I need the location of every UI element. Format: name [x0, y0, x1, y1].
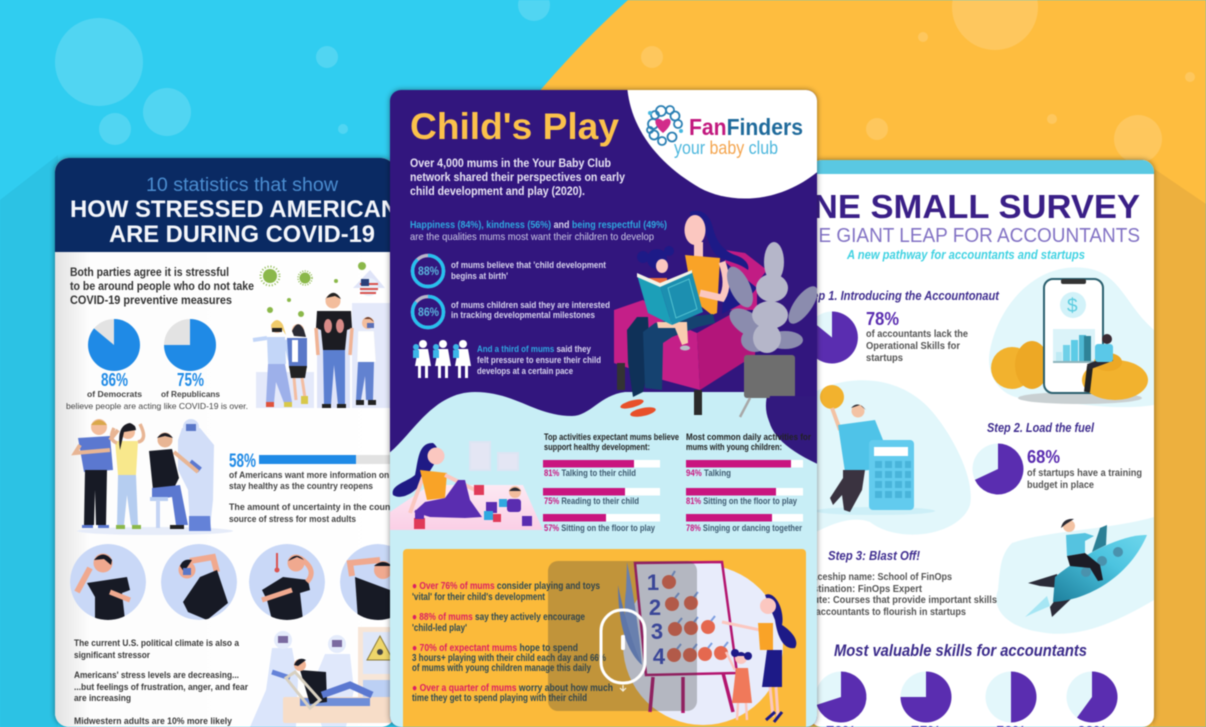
- light wave background: [385, 392, 817, 727]
- text: stress factors: ...but feelings of frustration, anger, and fear: [74, 682, 248, 693]
- illustration: medics with patient: [250, 627, 397, 727]
- illustration: phone and coins: $: [1067, 296, 1078, 317]
- pie: 50%: [986, 672, 1036, 727]
- text: a third of mums: felt pressure to ensure their child: [477, 355, 601, 365]
- white logo blob: [627, 85, 822, 199]
- text: course details: Spaceship name: School of FinOps: [801, 572, 952, 583]
- logo: FanFinders your baby club: FanFinders: [689, 114, 803, 140]
- qualities text: [410, 219, 667, 243]
- ring: 86%: [412, 296, 444, 328]
- chart: top activities expectant mums: support healthy development:: [544, 442, 650, 452]
- step 1 heading: Step 1. Introducing the Accountonaut: [801, 289, 1000, 303]
- title line 2: ARE DURING COVID-19: [109, 221, 375, 248]
- chart: most common daily activities: mums with young children:: [686, 442, 782, 452]
- chart: most common daily activities: [686, 432, 811, 534]
- chart: most common daily activities: Most common daily activities for: [686, 432, 811, 442]
- step 3 heading: Step 3: Blast Off!: [828, 549, 920, 563]
- text: course details: Destination: FinOps Expert: [801, 584, 923, 595]
- pie: 78% of accountants: of accountants lack the: [866, 329, 968, 340]
- pie: 68% of startups: budget in place: [1027, 480, 1094, 491]
- pie: 75% of Republicans: of Republicans: [161, 390, 221, 399]
- illustration: man with calculator: [810, 380, 971, 535]
- pie: 75%: [900, 672, 952, 727]
- text: course details: [801, 572, 997, 618]
- intro text: Over 4,000 mums in the Your Baby Club: [410, 156, 611, 170]
- chart: top activities expectant mums: [543, 432, 679, 534]
- text: key findings: 'vital' for their child's development: [412, 591, 545, 603]
- text: stress factors: are increasing: [74, 693, 131, 704]
- intro text: COVID-19 preventive measures: [70, 295, 232, 307]
- chart: most common daily activities: 94% Talking: [686, 468, 731, 479]
- symptom circle: fever: [249, 544, 325, 620]
- intro text: child development and play (2020).: [410, 184, 585, 198]
- text: key findings: ● Over 76% of mums consider playing and toys: [412, 580, 600, 592]
- text: key findings: ● 88% of mums say they actively encourage: [412, 611, 585, 623]
- pie: 75% of Republicans: [161, 319, 221, 399]
- text: 88% statement: of mums believe that 'child development: [451, 260, 606, 270]
- illustration: counting easel with mum and daughter: 4: [653, 644, 666, 669]
- ring: 86%: 86%: [418, 307, 439, 319]
- text: 86% statement: [451, 300, 610, 320]
- text: 86% statement: of mums children said they are interested: [451, 300, 610, 310]
- text: stress factors: significant stressor: [74, 650, 150, 661]
- chart: top activities expectant mums: Top activities expectant mums believe: [544, 432, 679, 442]
- scroll overlay with mouse icon: [548, 561, 697, 711]
- illustration: counting easel with mum and daughter: 2: [649, 595, 661, 620]
- chart: top activities expectant mums: 75% Reading to their child: [544, 496, 639, 507]
- illustration: potted plant: [722, 242, 823, 417]
- pie caption: believe people are acting like COVID-19 is over.: [66, 401, 248, 411]
- illustration: counting easel with mum and daughter: [618, 562, 796, 725]
- chart: most common daily activities: 81% Sitting on the floor to play: [686, 496, 798, 507]
- panel: yellow facts box: [403, 549, 806, 727]
- chart: top activities expectant mums: 81% Talking to their child: [544, 468, 636, 479]
- text: a third of mums: And a third of mums said they: [477, 344, 591, 354]
- pie: 78% of accountants: Operational Skills for: [866, 341, 960, 352]
- text: information wanted: The amount of uncertainty in the country is a: [229, 502, 420, 513]
- text: key findings: of mums with young children manage this daily: [412, 662, 591, 674]
- subtitle: 10 statistics that show: [146, 175, 338, 196]
- text: 86% statement: in tracking developmental milestones: [451, 310, 595, 320]
- blob: right purple shape: [768, 396, 822, 466]
- stat: 58% bar: [228, 452, 390, 468]
- title line 1: HOW STRESSED AMERICANS: [70, 196, 414, 223]
- intro text: [410, 156, 625, 198]
- panel: stressed Americans infographic: [55, 158, 420, 727]
- text: key findings: 3 hours+ playing with their child each day and 66%: [412, 652, 607, 664]
- text: key findings: time they get to spend playing with their child: [412, 692, 587, 704]
- text: key findings: [412, 580, 613, 704]
- pie: 75% of Republicans: 75%: [177, 370, 204, 390]
- text: a third of mums: develops at a certain pace: [477, 366, 573, 376]
- pie: 60%: [1066, 672, 1118, 727]
- logo: FanFinders your baby club: your baby club: [674, 138, 778, 158]
- logo: FanFinders your baby club: [647, 106, 803, 158]
- pie: 78% of accountants: [806, 309, 968, 364]
- illustration: counting easel with mum and daughter: 1: [647, 570, 659, 595]
- text: stress factors: Americans' stress levels are decreasing...: [74, 670, 239, 681]
- symptom circle: dizziness: [161, 544, 237, 620]
- intro text: Both parties agree it is stressful: [70, 267, 229, 279]
- illustration: people with medic: [75, 419, 233, 535]
- pie: 68% of startups: of startups have a training: [1027, 468, 1142, 479]
- header band: [55, 158, 400, 252]
- ring: 88%: [412, 256, 444, 286]
- title: Child's Play: [410, 106, 619, 147]
- illustration: accountant on rocket: [996, 517, 1154, 634]
- subtitle: ONE GIANT LEAP FOR ACCOUNTANTS: [790, 225, 1140, 247]
- illustration: mum reading with child: [614, 211, 767, 419]
- pie: 86% of Democrats: 86%: [101, 370, 128, 390]
- symptom circle: headache: [340, 544, 391, 621]
- pie: 78% of accountants: startups: [866, 353, 903, 364]
- pie: 70%: [816, 672, 866, 727]
- text: information wanted: source of stress for most adults: [229, 514, 356, 525]
- chart: most common daily activities: 78% Singing or dancing together: [686, 523, 802, 534]
- tagline: A new pathway for accountants and startups: [846, 248, 1085, 262]
- pie: 86% of Democrats: of Democrats: [87, 390, 143, 399]
- icon: three mums with children: [413, 340, 471, 378]
- intro text: [70, 267, 254, 307]
- illustration: mum playing with blocks: [390, 442, 543, 530]
- title: ONE SMALL SURVEY: [786, 188, 1140, 225]
- text: 88% statement: begins at birth': [451, 271, 508, 281]
- qualities text: are the qualities mums most want their children to develop: [410, 231, 654, 243]
- text: course details: for accountants to flourish in startups: [801, 607, 966, 618]
- illustration: phone and coins: [989, 267, 1154, 407]
- text: information wanted: [228, 470, 390, 523]
- text: stress factors: Midwestern adults are 10% more likely: [74, 716, 233, 727]
- intro text: network shared their perspectives on early: [410, 170, 625, 184]
- panel: one small survey infographic: [786, 160, 1154, 727]
- step 2 heading: Step 2. Load the fuel: [987, 421, 1094, 435]
- symptom circle: coughing: [70, 544, 146, 620]
- text: stress factors: The current U.S. political climate is also a: [74, 638, 240, 649]
- pie: 86% of Democrats: [87, 319, 143, 399]
- pie: 68% of startups: [972, 444, 1142, 494]
- text: information wanted: of Americans want more information on how to: [229, 470, 419, 481]
- header strip: [810, 160, 1154, 174]
- text: information wanted: stay healthy as the country reopens: [229, 481, 373, 492]
- qualities text: Happiness (84%), kindness (56%) and being respectful (49%): [410, 219, 667, 231]
- text: 88% statement: [451, 260, 606, 281]
- text: key findings: ● 70% of expectant mums hope to spend: [412, 642, 578, 654]
- text: a third of mums: [477, 344, 601, 376]
- ring: 88%: 88%: [418, 266, 439, 278]
- text: stress factors: [74, 638, 248, 727]
- illustration: crowd with virus particles: [253, 262, 397, 408]
- text: course details: Route: Courses that provide important skills: [801, 595, 997, 606]
- panel: Child's Play infographic: [385, 85, 823, 727]
- text: key findings: ● Over a quarter of mums worry about how much: [412, 682, 613, 694]
- text: key findings: 'child-led play': [412, 622, 467, 634]
- stat: 58% bar: 58%: [229, 451, 256, 472]
- pie: 78% of accountants: 78%: [866, 309, 899, 329]
- heading: most valuable skills: Most valuable skills for accountants: [834, 641, 1087, 660]
- chart: top activities expectant mums: 57% Sitting on the floor to play: [544, 523, 656, 534]
- illustration: counting easel with mum and daughter: 3: [651, 619, 663, 644]
- intro text: to be around people who do not take: [70, 281, 254, 293]
- pie: 68% of startups: 68%: [1027, 447, 1060, 467]
